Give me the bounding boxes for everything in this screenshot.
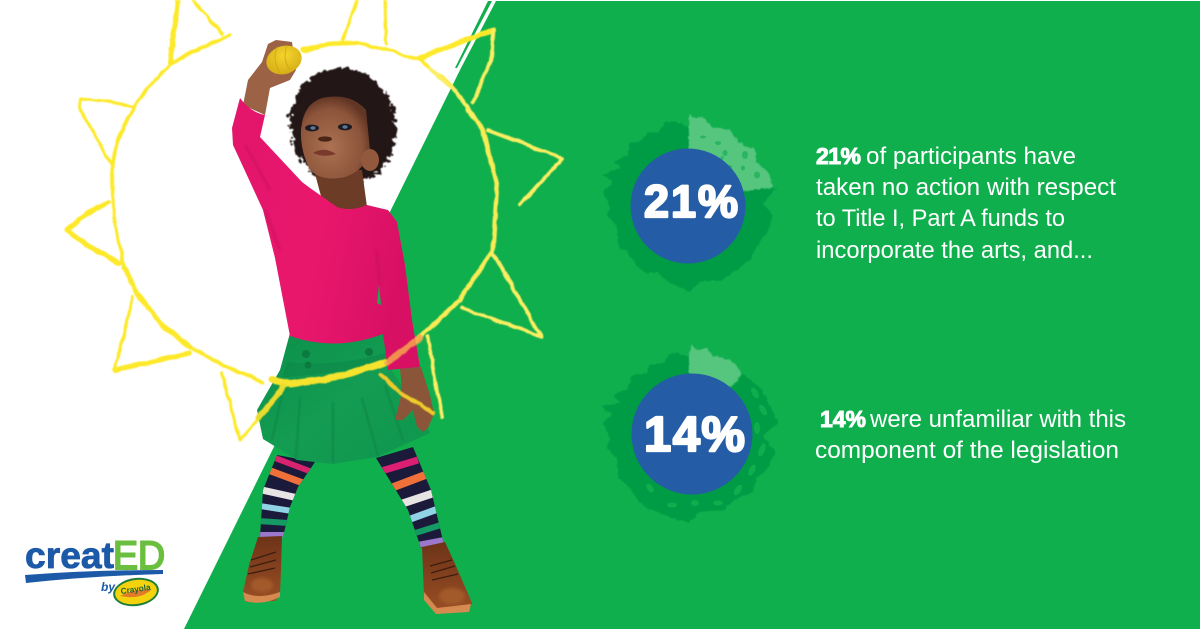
child: eyes bbox=[305, 124, 352, 131]
chalk: band across skirt bbox=[273, 362, 385, 384]
child: raised hand bbox=[243, 40, 296, 115]
child: hair bbox=[277, 56, 409, 196]
logo: creat wordmark: creat bbox=[25, 535, 114, 576]
child: skirt bbox=[257, 331, 430, 464]
child: face bbox=[301, 96, 370, 178]
logo: blue swoosh bbox=[25, 570, 163, 583]
child: tights left leg bbox=[260, 455, 315, 537]
sun: outline arc upper left bbox=[112, 35, 230, 268]
donut: hatch holes bbox=[645, 386, 769, 508]
illustration: child bbox=[232, 40, 472, 614]
child: shirt shading bbox=[245, 145, 380, 285]
sun: outline arc bottom left bbox=[190, 347, 263, 382]
chalk: band across sleeve bbox=[388, 338, 420, 362]
panel: 21% statistic donut bbox=[602, 113, 777, 292]
child: neck bbox=[314, 170, 367, 209]
logo: by: by bbox=[101, 580, 116, 594]
donut: slice scribble holes bbox=[700, 136, 760, 178]
sun: arc and rays on green bbox=[400, 110, 497, 353]
text: 14% description: component of the legislation bbox=[815, 437, 1119, 464]
child: ball in hand bbox=[263, 41, 305, 79]
donut: 21% value: 21% bbox=[644, 176, 738, 227]
sun: outline arc top bbox=[303, 43, 357, 50]
text: 21% description: to Title I, Part A funds to bbox=[816, 205, 1065, 232]
donut: light 21% slice bbox=[689, 113, 773, 206]
chalk: stroke over left of skirt bbox=[258, 387, 283, 418]
child: lower hand bbox=[395, 367, 434, 432]
logo: ED wordmark: ED bbox=[113, 534, 165, 578]
child: pink shirt bbox=[232, 98, 420, 370]
illustration: chalk sun behind child bbox=[67, 0, 562, 440]
child: mouth bbox=[313, 150, 336, 156]
logo: createED by Crayola bbox=[25, 534, 165, 609]
sun: thick rays bbox=[67, 0, 493, 370]
sun: outline arc lower left bbox=[125, 268, 190, 347]
logo: Crayola oval: Crayola bbox=[120, 582, 151, 596]
chalk: stroke over hand bbox=[380, 375, 433, 413]
text: 14% description: were unfamiliar with this bbox=[869, 406, 1126, 433]
sun: pale rays on green bbox=[428, 30, 562, 417]
text: 14% description: 14% bbox=[820, 406, 866, 432]
donut: blue centre bbox=[630, 148, 746, 264]
panel: 14% statistic donut bbox=[602, 345, 778, 523]
donut: light 14% slice bbox=[689, 345, 742, 400]
donut: 14% value: 14% bbox=[644, 408, 745, 462]
child: gap between arm and body bbox=[377, 285, 381, 305]
text: 21% description: taken no action with respect bbox=[816, 174, 1116, 201]
sun: outline arc top right bbox=[357, 43, 468, 108]
donut: blue centre bbox=[632, 374, 752, 494]
text: 21% description: of participants have bbox=[866, 143, 1076, 170]
donut: dark scribble ring bbox=[602, 122, 777, 292]
child: ear bbox=[361, 149, 379, 171]
text: 21% description: 21% bbox=[816, 143, 861, 169]
illustration: chalk strokes over child bbox=[258, 338, 433, 418]
text: 21% description: incorporate the arts, and... bbox=[816, 237, 1093, 264]
child: left boot bbox=[243, 536, 282, 603]
child: right boot bbox=[422, 542, 472, 614]
donut: dark hatched ring bbox=[602, 353, 778, 523]
sun: thin rays bbox=[79, 0, 386, 440]
child: tights right leg bbox=[376, 447, 444, 548]
child: nose bbox=[318, 136, 332, 142]
